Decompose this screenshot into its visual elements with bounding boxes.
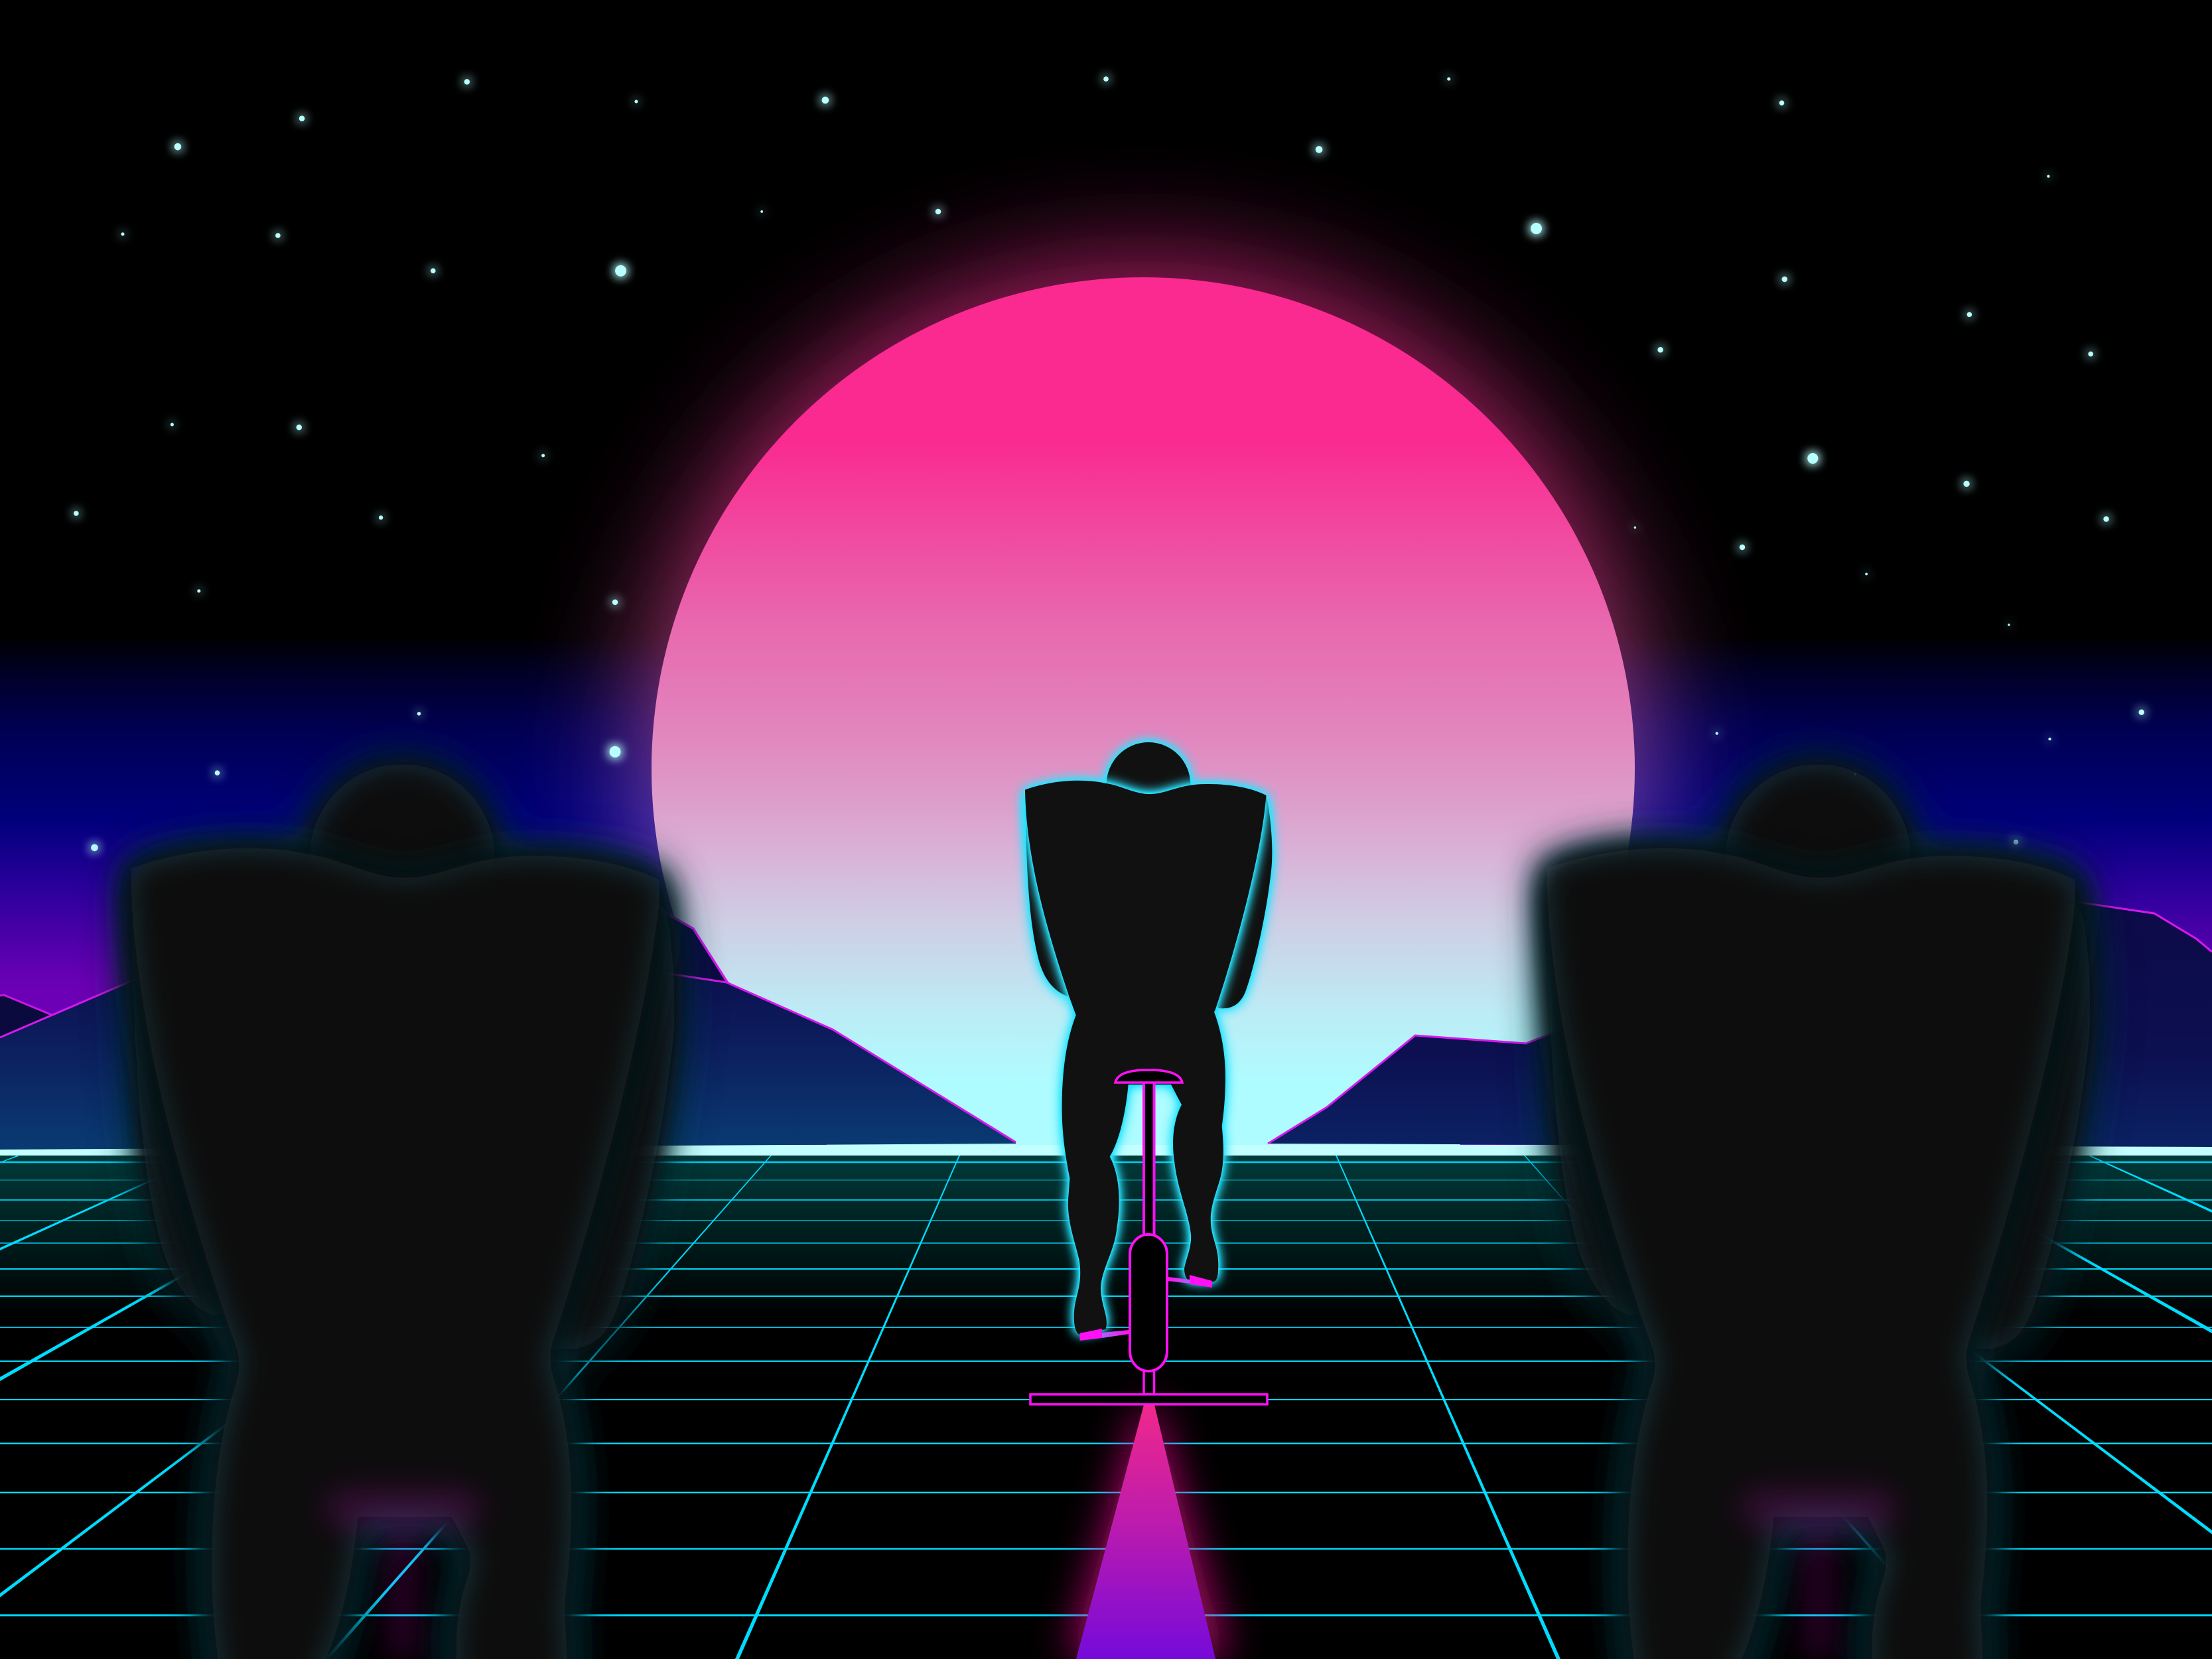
ridge line: left (0, 949, 1016, 1142)
arms (1025, 790, 1272, 1008)
ground plane (0, 1156, 2212, 1659)
road glow (1070, 1405, 1227, 1659)
central cyclist (1025, 742, 1272, 1404)
mountain: back peak near sun (597, 876, 728, 983)
mountain: far left peak (0, 995, 52, 1041)
neon grid (0, 1155, 2212, 1659)
wheel (1130, 1234, 1167, 1371)
horizon light strip (0, 1145, 2212, 1156)
rider head and arms (1025, 742, 1272, 1008)
outer teal halo (131, 764, 674, 1659)
road beam (1076, 1405, 1215, 1659)
saddle (1115, 1070, 1182, 1083)
ridge line: far left peak (0, 995, 52, 1015)
mountain: right ridge (1268, 882, 2212, 1147)
pedal: right (1190, 1275, 1212, 1288)
background sky gradient (0, 0, 2212, 1158)
crank arm: right (1168, 1277, 1190, 1284)
sun glow (649, 275, 1637, 1263)
seat post (1144, 1082, 1154, 1236)
blurred foreground rider: left (131, 764, 674, 1659)
torso and legs silhouette (131, 848, 661, 1659)
torso halo (131, 848, 661, 1659)
blurred foreground rider: right (1547, 764, 2090, 1659)
mountain: front left ridge (0, 949, 1016, 1150)
arms and head glow (1025, 742, 1272, 1008)
ridge line: right (1268, 882, 2212, 1144)
fork stub (1144, 1370, 1154, 1394)
crank arm: left (1102, 1330, 1129, 1338)
mountains: right range (1268, 882, 2212, 1147)
bicycle (1030, 1070, 1267, 1404)
torso glow (1025, 781, 1266, 1335)
mountains: left range (0, 876, 1016, 1150)
head (1107, 742, 1190, 827)
sun disc (652, 277, 1635, 1145)
pedal: left (1080, 1329, 1102, 1341)
handlebar base (1030, 1394, 1267, 1404)
blurred saddle and post (325, 1489, 481, 1659)
ridge line: back peak (597, 876, 728, 983)
star field (74, 76, 2144, 851)
head and arms silhouette (131, 764, 674, 1349)
rider torso and legs (1025, 781, 1266, 1335)
